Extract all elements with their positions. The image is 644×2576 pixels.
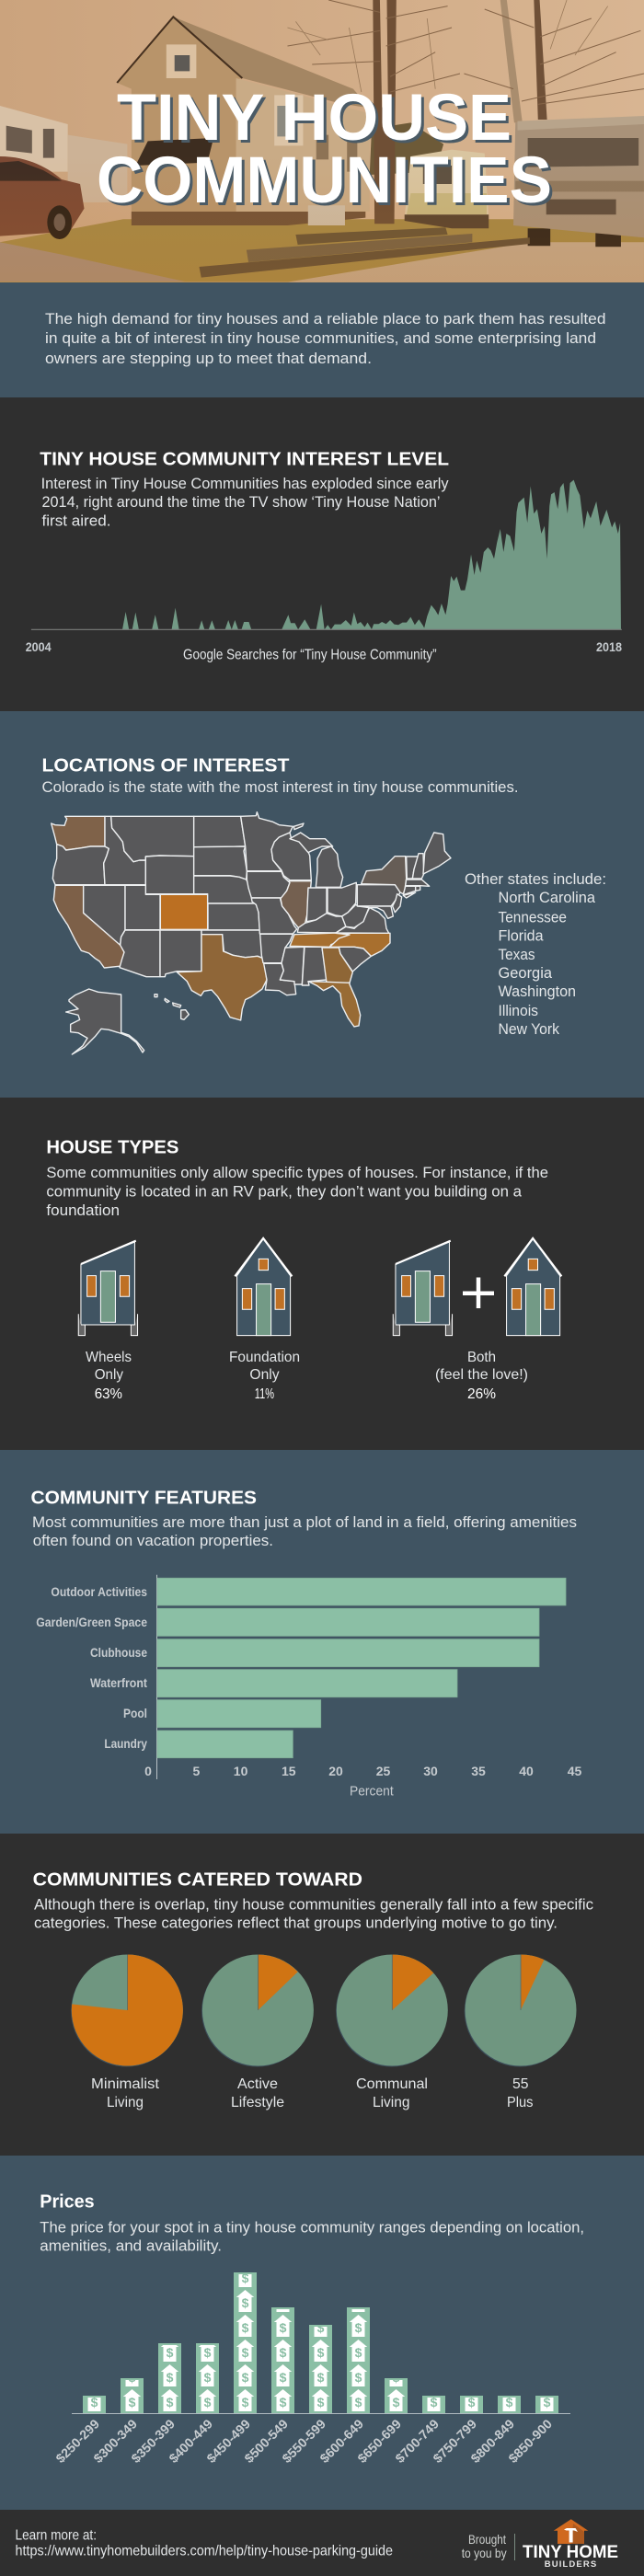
intro text: in quite a bit of interest in tiny house communities, and some enterprising land (45, 329, 596, 347)
label: minimalist living: Minimalist (91, 2076, 160, 2092)
pictogram chart: price ranges: $ (167, 2345, 174, 2360)
label: communal living: Living (373, 2095, 410, 2110)
categories description: Although there is overlap, tiny house communities generally fall into a few specific (34, 1895, 593, 1913)
title: COMMUNITIES (97, 144, 552, 217)
interest description (41, 475, 449, 530)
pictogram chart: price ranges: $350-399 (128, 2416, 178, 2466)
bar chart: amenities: Waterfront (90, 1675, 147, 1690)
title (97, 82, 552, 217)
pictogram chart: price ranges: $550-599 (279, 2416, 328, 2466)
pictogram chart: price ranges: $ (167, 2370, 174, 2385)
pictogram chart: price ranges: $ (431, 2395, 438, 2409)
logo: tiny home builders (523, 2519, 618, 2570)
panel: house types (0, 1098, 644, 1450)
label: 55 plus (507, 2076, 534, 2110)
pictogram chart: price ranges: $ (355, 2345, 362, 2360)
title: TINY HOUSE (117, 82, 512, 155)
icon: house on foundation (235, 1238, 292, 1336)
area chart: google searches (31, 480, 622, 629)
pictogram chart: price ranges: $ (204, 2370, 212, 2385)
credit text: Brought (468, 2532, 506, 2547)
interest description: 2014, right around the time the TV show ‘Tiny House Nation’ (42, 493, 440, 511)
credit text (462, 2532, 515, 2560)
pictogram chart: price ranges: $ (355, 2395, 362, 2409)
pictogram chart: price ranges: $ (280, 2345, 287, 2360)
source link: https://www.tinyhomebuilders.com/help/tiny-house-parking-guide (15, 2543, 393, 2559)
panel: hero banner (0, 0, 644, 282)
heading: community features: COMMUNITY FEATURES (31, 1488, 257, 1508)
label: communal living: Communal (356, 2076, 428, 2092)
label: both: 26% (467, 1386, 496, 1402)
categories description (34, 1895, 593, 1931)
pictogram chart: price ranges: $ (506, 2395, 513, 2409)
bar chart: amenities: 15 (282, 1764, 296, 1778)
features description: often found on vacation properties. (33, 1532, 273, 1549)
pictogram chart: price ranges: $ (280, 2320, 287, 2335)
icon: house on wheels (78, 1241, 138, 1336)
pictogram chart: price ranges: $ (280, 2370, 287, 2385)
list: other states: North Carolina (499, 889, 596, 906)
pictogram chart: price ranges: $500-549 (241, 2416, 291, 2466)
pictogram chart: price ranges: $ (91, 2395, 98, 2409)
list: other states: New York (499, 1020, 559, 1038)
pictogram chart: price ranges: $650-699 (354, 2416, 404, 2466)
features description: Most communities are more than just a plot of land in a field, offering amenities (32, 1513, 577, 1531)
western states (52, 816, 267, 1054)
label: both: (feel the love!) (435, 1367, 528, 1383)
label: minimalist living: Living (107, 2095, 144, 2110)
bar chart: amenities: Percent (350, 1784, 394, 1800)
pictogram chart: price ranges: $ (393, 2395, 400, 2409)
pictogram chart: price ranges: $ (242, 2320, 249, 2335)
pictogram chart: price ranges: $ (204, 2395, 212, 2409)
categories description: categories. These categories reflect that groups underlying motive to go tiny. (34, 1914, 558, 1931)
label: both (435, 1350, 528, 1402)
panel: interest level (0, 397, 644, 711)
pictogram chart: price ranges: $ (242, 2345, 249, 2360)
house types description: Some communities only allow specific types of houses. For instance, if the (46, 1164, 548, 1181)
list: other states: Illinois (499, 1002, 538, 1019)
pictogram chart: price ranges: $750-799 (430, 2416, 479, 2466)
prices description: amenities, and availability. (40, 2237, 222, 2255)
pictogram chart: price ranges: $ (468, 2395, 476, 2409)
panel: community features (0, 1450, 644, 1834)
pictogram chart: price ranges: $ (129, 2370, 136, 2385)
panel: communities catered toward (0, 1834, 644, 2156)
label: wheels only: Only (95, 1367, 123, 1383)
heading: interest level: TINY HOUSE COMMUNITY INTEREST LEVEL (40, 450, 449, 470)
label: active lifestyle: Active (237, 2076, 278, 2092)
bar chart: amenities: Garden/Green Space (36, 1615, 147, 1629)
pictogram chart: price ranges: $250-299 (52, 2416, 102, 2466)
hero photo: tiny house park (0, 0, 644, 282)
icon: both house types (393, 1238, 561, 1336)
list: other states: Washington (499, 983, 576, 1000)
house types description: community is located in an RV park, they don’t want you building on a (46, 1182, 523, 1200)
hawaii (155, 995, 189, 1019)
list: other states: Other states include: (465, 870, 606, 888)
interest description: first aired. (42, 512, 110, 530)
pictogram chart: price ranges: $ (355, 2370, 362, 2385)
pictogram chart: price ranges: $800-849 (467, 2416, 517, 2466)
axis label: 2004: 2004 (26, 639, 52, 654)
bar chart: amenities: 25 (376, 1764, 390, 1778)
label: wheels only: 63% (95, 1386, 122, 1402)
prices description: The price for your spot in a tiny house community ranges depending on location, (40, 2219, 584, 2237)
pie chart: communal living (336, 1954, 448, 2066)
list: other states: Florida (499, 926, 544, 944)
pictogram chart: price ranges: $ (280, 2295, 287, 2310)
label: communal living (356, 2076, 428, 2110)
map: united states (52, 812, 451, 1054)
interest description: Interest in Tiny House Communities has exploded since early (41, 475, 449, 492)
pie chart: minimalist living (71, 1954, 183, 2066)
bar chart: amenities: Outdoor Activities (51, 1584, 147, 1599)
bar chart: amenities: 40 (519, 1764, 534, 1778)
label: foundation only: Only (249, 1367, 280, 1383)
credit text: to you by (462, 2546, 507, 2560)
pictogram chart: price ranges: $ (393, 2370, 400, 2385)
list: other states: Georgia (499, 964, 553, 982)
label: foundation only (229, 1350, 300, 1402)
pie chart: active lifestyle (201, 1954, 314, 2066)
panel: footer (0, 2510, 644, 2576)
bar chart: amenities: Pool (123, 1706, 147, 1720)
panel: locations of interest (0, 711, 644, 1098)
logo: tiny home builders: BUILDERS (545, 2559, 596, 2570)
pictogram chart: price ranges: $ (355, 2320, 362, 2335)
pictogram chart: price ranges: $ (280, 2395, 287, 2409)
chart caption: Google Searches for “Tiny House Community” (183, 648, 437, 663)
label: wheels only (86, 1350, 132, 1402)
pictogram chart: price ranges: $ (129, 2395, 136, 2409)
bar chart: amenities: 0 (144, 1764, 152, 1778)
pictogram chart: price ranges: $ (242, 2395, 249, 2409)
pictogram chart: price ranges: $400-449 (166, 2416, 215, 2466)
intro text: The high demand for tiny houses and a reliable place to park them has resulted (45, 310, 605, 328)
pictogram chart: price ranges: $ (204, 2345, 212, 2360)
pictogram chart: price ranges: $ (544, 2395, 551, 2409)
house types description: foundation (46, 1202, 120, 1219)
pictogram chart: price ranges: $700-749 (392, 2416, 442, 2466)
label: wheels only: Wheels (86, 1350, 132, 1365)
logo: tiny home builders: TINY HOME (523, 2543, 618, 2562)
list: other states: Texas (499, 946, 535, 963)
pictogram chart: price ranges: $450-499 (203, 2416, 253, 2466)
pictogram chart: price ranges: $ (317, 2345, 325, 2360)
bar chart: amenities: 5 (193, 1764, 201, 1778)
pictogram chart: price ranges: $ (317, 2395, 325, 2409)
pictogram chart: price ranges: $ (242, 2295, 249, 2310)
pictogram chart: price ranges: $ (167, 2395, 174, 2409)
eastern states (241, 812, 451, 1027)
heading: prices: Prices (40, 2191, 95, 2212)
label: foundation only: Foundation (229, 1350, 300, 1365)
locations description: Colorado is the state with the most interest in tiny house communities. (42, 778, 519, 796)
prices description (40, 2219, 584, 2255)
label: active lifestyle (231, 2076, 284, 2110)
list: other states (465, 870, 606, 1038)
pictogram chart: price ranges: $300-349 (90, 2416, 140, 2466)
pie chart: 55 plus (465, 1954, 576, 2066)
label: both: Both (467, 1350, 496, 1365)
bar chart: amenities: Clubhouse (90, 1645, 147, 1660)
panel: introduction (0, 282, 644, 397)
label: 55 plus: Plus (507, 2095, 534, 2110)
source link (15, 2528, 393, 2559)
pictogram chart: price ranges: $ (317, 2370, 325, 2385)
pictogram chart: price ranges (52, 2265, 570, 2466)
pictogram chart: price ranges: $ (242, 2271, 249, 2285)
heading: house types: HOUSE TYPES (46, 1137, 178, 1157)
bar chart: amenities: 20 (328, 1764, 343, 1778)
intro text: owners are stepping up to meet that demand. (45, 350, 372, 367)
bar chart: amenities: Laundry (104, 1736, 147, 1751)
pictogram chart: price ranges: $ (242, 2370, 249, 2385)
source link: Learn more at: (15, 2528, 97, 2544)
bar chart: amenities: 30 (423, 1764, 438, 1778)
bar chart: amenities: 35 (471, 1764, 486, 1778)
label: foundation only: 11% (255, 1386, 274, 1402)
pictogram chart: price ranges: $ (317, 2320, 325, 2335)
label: minimalist living (91, 2076, 160, 2110)
pictogram chart: price ranges: $ (355, 2295, 362, 2310)
bar chart: amenities: 45 (568, 1764, 581, 1778)
label: 55 plus: 55 (512, 2076, 529, 2092)
list: other states: Tennessee (499, 908, 567, 926)
intro text (45, 310, 605, 367)
panel: prices (0, 2156, 644, 2510)
pictogram chart: price ranges: $850-900 (505, 2416, 555, 2466)
pictogram chart: price ranges: $600-649 (316, 2416, 366, 2466)
alaska (66, 989, 144, 1054)
house types description (46, 1164, 548, 1219)
bar chart: amenities (36, 1575, 581, 1800)
heading: locations: LOCATIONS OF INTEREST (42, 755, 289, 776)
features description (32, 1513, 577, 1549)
label: active lifestyle: Lifestyle (231, 2095, 284, 2110)
heading: communities catered toward: COMMUNITIES CATERED TOWARD (33, 1869, 362, 1890)
bar chart: amenities: 10 (234, 1764, 248, 1778)
axis label: 2018: 2018 (596, 639, 622, 654)
